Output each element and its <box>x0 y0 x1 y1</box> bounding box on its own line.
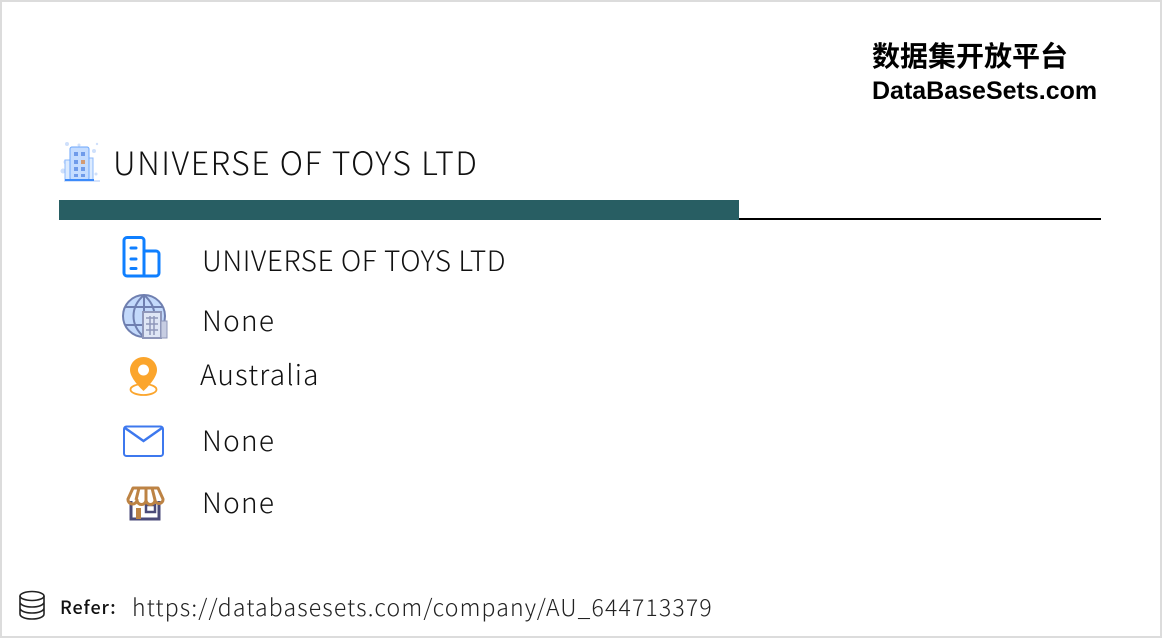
teal bar <box>59 200 739 220</box>
icon: database <box>19 590 45 620</box>
row text: country: Australia <box>200 354 320 394</box>
icon: company building illustration <box>60 142 100 182</box>
header rule <box>59 200 1101 220</box>
row text: website: None <box>202 300 275 340</box>
black line <box>739 218 1101 220</box>
row text: store: None <box>202 482 275 522</box>
icon: storefront <box>126 486 164 520</box>
brand heading <box>872 35 1097 105</box>
icon: globe with building <box>122 294 168 339</box>
row text: email: None <box>202 420 275 460</box>
title: UNIVERSE OF TOYS LTD <box>113 139 478 185</box>
brand chinese name: 数据集开放平台 <box>872 35 1068 75</box>
row text: name: UNIVERSE OF TOYS LTD <box>202 240 506 280</box>
icon: location pin <box>130 357 158 396</box>
refer label: Refer: <box>60 594 116 620</box>
refer url: https://databasesets.com/company/AU_644713379 <box>132 589 713 623</box>
brand url: DataBaseSets.com <box>872 77 1097 105</box>
icon: envelope <box>123 426 164 457</box>
icon: buildings <box>122 236 160 278</box>
